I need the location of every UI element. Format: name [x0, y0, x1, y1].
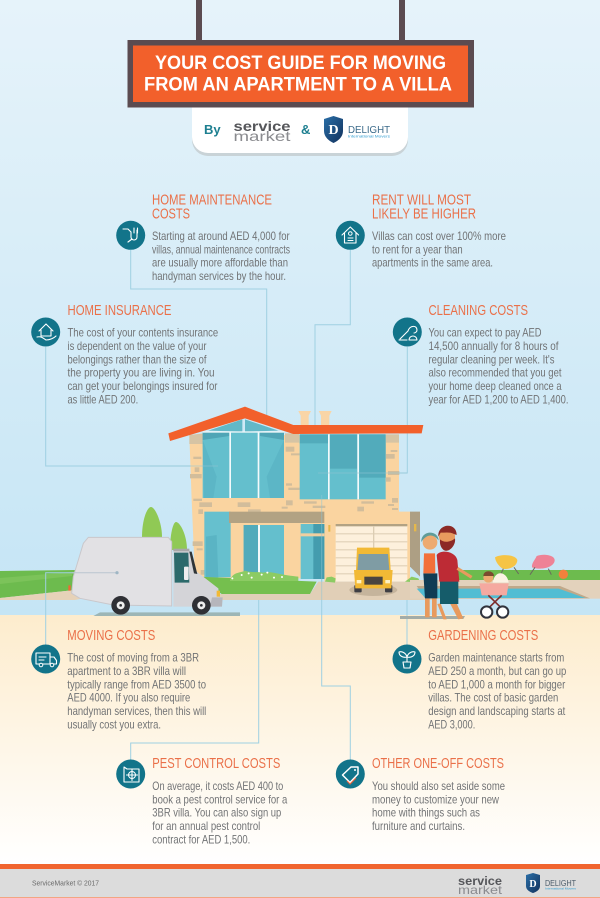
heading: CLEANING COSTS — [428, 302, 528, 319]
footer logo: delight: D — [529, 879, 537, 890]
heading: GARDENING COSTS — [428, 627, 538, 644]
body text — [67, 651, 206, 731]
body text: typically range from AED 3500 to — [67, 677, 206, 691]
logo: servicemarket — [234, 118, 291, 144]
sign posts — [196, 0, 405, 41]
connector lines — [46, 250, 407, 760]
body text — [428, 326, 568, 406]
body text: Villas can cost over 100% more — [372, 229, 506, 243]
title text: FROM AN APARTMENT TO A VILLA — [144, 75, 452, 96]
patio — [410, 580, 600, 599]
heading: HOME MAINTENANCE — [152, 192, 272, 208]
lounge chair yellow — [495, 555, 519, 575]
body text: money to customize your new — [372, 792, 499, 806]
body text: the property you are living in. You — [68, 366, 214, 380]
wall lamp — [414, 524, 416, 531]
body text: contract for AED 1,500. — [152, 832, 250, 846]
body text: furniture and curtains. — [372, 819, 465, 833]
awning — [229, 512, 324, 523]
icon: delivery truck — [31, 644, 60, 674]
body text: regular cleaning per week. It's — [428, 352, 554, 366]
body text: usually cost you extra. — [67, 717, 161, 731]
body text: are usually more affordable than — [152, 256, 288, 270]
body text: You can expect to pay AED — [428, 326, 542, 340]
ground shadow — [400, 616, 465, 619]
body text: for an annual pest control — [152, 819, 260, 833]
body text: 14,500 annually for 8 hours of — [428, 339, 559, 353]
ampersand: & — [301, 122, 310, 137]
body text: handyman services, then this will — [67, 704, 206, 718]
rear wheel — [111, 596, 130, 615]
body text — [152, 229, 290, 283]
panel card — [192, 107, 408, 153]
footer logo: delight: International Movers — [545, 886, 577, 890]
body text: villas, annual maintenance contracts — [152, 242, 290, 256]
yellow car — [349, 548, 397, 596]
body text: Garden maintenance starts from — [428, 651, 564, 665]
footer logo: servicemarket: service — [458, 874, 502, 888]
body text: The cost of moving from a 3BR — [67, 651, 199, 665]
van shadow — [93, 612, 240, 616]
body text: is dependent on the value of your — [68, 339, 206, 353]
body text: to rent for a year than — [372, 242, 463, 256]
front lawn — [197, 577, 317, 594]
body text: The cost of your contents insurance — [68, 326, 218, 340]
body text: AED 4000. If you also require — [67, 691, 191, 705]
body text: as little AED 200. — [68, 392, 138, 406]
garage door — [336, 524, 407, 582]
background: sand — [0, 615, 600, 865]
heading: HOME INSURANCE — [68, 302, 172, 319]
line dot on van — [115, 571, 119, 574]
gable glass — [208, 419, 278, 432]
footer logo: delight: DELIGHT — [545, 878, 576, 888]
heading: RENT WILL MOST — [372, 192, 471, 208]
chimneys — [298, 411, 332, 426]
body text: to AED 1,000 a month for bigger — [428, 677, 565, 691]
tail light — [68, 585, 71, 591]
ground floor glass panel — [204, 512, 231, 577]
left lawn and path — [0, 570, 85, 600]
body text: also recommended that you get — [428, 366, 562, 380]
body text: your home deep cleaned once a — [428, 379, 562, 393]
body text: home with things such as — [372, 806, 480, 820]
stroller with baby — [479, 571, 509, 618]
heading: COSTS — [152, 206, 190, 222]
body text: can get your belongings insured for — [68, 379, 218, 393]
front window — [244, 525, 284, 576]
icon: pest target — [116, 760, 145, 788]
footer logo: delight — [526, 873, 577, 893]
body text: AED 3,000. — [428, 717, 475, 731]
heading: OTHER ONE-OFF COSTS — [372, 755, 504, 772]
body text — [152, 779, 288, 846]
lounge chair pink — [530, 555, 555, 575]
line across van — [72, 572, 117, 574]
title text — [144, 53, 452, 96]
body text — [428, 651, 567, 731]
logo: delight: DELIGHT — [348, 125, 390, 136]
back lawn — [453, 570, 600, 580]
body text: book a pest control service for a — [152, 792, 288, 806]
upper left windows — [203, 431, 284, 498]
section: home insurance — [31, 302, 218, 406]
footer logo: servicemarket: market — [458, 883, 503, 897]
section: home maintenance costs — [116, 192, 290, 283]
faint lines over the house — [150, 466, 407, 600]
section: pest control costs — [116, 755, 288, 846]
icon: vacuum cleaner — [393, 318, 422, 346]
driveway — [218, 582, 433, 600]
logo: servicemarket: service — [234, 118, 291, 134]
footer logo: servicemarket — [458, 874, 503, 897]
villa house — [168, 407, 433, 600]
body text: Starting at around AED 4,000 for — [152, 229, 290, 243]
trees — [142, 507, 187, 550]
section: gardening costs — [392, 627, 567, 731]
body text: apartments in the same area. — [372, 256, 493, 270]
logo: delight — [324, 116, 390, 143]
heading — [372, 192, 476, 222]
body text — [372, 779, 505, 833]
roof — [168, 407, 423, 441]
logo: delight: International Movers — [348, 134, 390, 138]
body text: apartment to a 3BR villa will — [67, 664, 186, 678]
front wheel — [192, 596, 211, 615]
body text: villas. The cost of basic garden — [428, 691, 558, 705]
front door — [301, 524, 330, 579]
side pillar — [410, 512, 420, 577]
icon: potted plant — [392, 644, 422, 674]
body text: You should also set aside some — [372, 779, 505, 793]
background: sky — [0, 0, 600, 615]
man — [437, 526, 472, 619]
section: moving costs — [31, 627, 206, 731]
panel shadow — [192, 107, 408, 156]
heading: MOVING COSTS — [67, 627, 155, 644]
sponsor panel — [192, 107, 408, 156]
van box — [72, 537, 172, 606]
icon: plumbing tap — [116, 221, 145, 250]
heading: LIKELY BE HIGHER — [372, 206, 476, 222]
shrubs — [197, 571, 421, 583]
body text: belongings rather than the size of — [68, 352, 207, 366]
by label: By — [204, 122, 221, 137]
title text: YOUR COST GUIDE FOR MOVING — [155, 53, 446, 74]
section: other one-off costs — [336, 755, 505, 833]
copyright: ServiceMarket © 2017 — [32, 878, 99, 888]
heading: PEST CONTROL COSTS — [152, 755, 280, 772]
section: cleaning costs — [393, 302, 568, 406]
body text: 3BR villa. You can also sign up — [152, 806, 282, 820]
icon: price tag — [336, 760, 365, 788]
section: rent — [336, 192, 506, 270]
title sign — [128, 40, 474, 108]
house walls — [189, 433, 410, 582]
icon: house with price — [336, 221, 365, 250]
body text — [68, 326, 218, 406]
body text: On average, it costs AED 400 to — [152, 779, 284, 793]
backyard with pool — [400, 526, 600, 619]
footer — [0, 864, 600, 898]
upper right windows — [300, 434, 386, 499]
body text: AED 250 a month, but can go up — [428, 664, 567, 678]
bricks — [190, 447, 399, 575]
pool — [417, 586, 590, 598]
woman — [421, 533, 439, 617]
icon: house in hand — [31, 318, 60, 346]
logo: delight: D — [328, 123, 339, 138]
body text — [372, 229, 506, 270]
beach ball — [559, 570, 568, 579]
van cab — [173, 549, 223, 607]
moving van — [68, 537, 240, 616]
body text: design and landscaping starts at — [428, 704, 566, 718]
body text: handyman services by the hour. — [152, 269, 286, 283]
heading — [152, 192, 272, 222]
logo: servicemarket: market — [234, 128, 291, 144]
